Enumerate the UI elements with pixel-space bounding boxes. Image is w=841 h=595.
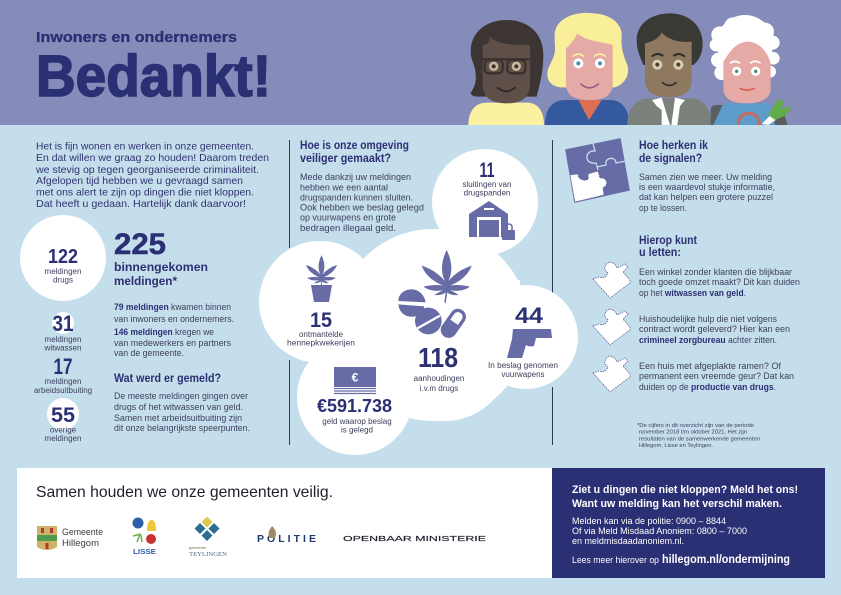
- text: source of reports: van inwoners en ondernemers.: [114, 314, 234, 325]
- icon: handgun: [507, 329, 552, 358]
- text: crimineel zorgbureau: [639, 314, 790, 346]
- text: safer environment: hebben we een aantal: [300, 182, 388, 194]
- heading: Hierop kunt u letten: Hierop kunt: [639, 235, 697, 247]
- stat: 118 aanhoudingen i.v.m drugs: aanhoudingen: [414, 374, 464, 383]
- icon: banknotes: €: [352, 370, 359, 384]
- stat: 122 meldingen drugs: meldingen: [45, 267, 81, 276]
- logo: Politie: [257, 526, 316, 545]
- stat: 591.738 euro seized: [317, 367, 392, 434]
- logo: Teylingen: [189, 516, 228, 558]
- text: signals: [639, 172, 775, 214]
- text: crimineel zorgbureau: contract wordt geleverd? Hier kan een: [639, 324, 790, 335]
- logo: Teylingen: gemeente: [189, 545, 206, 550]
- stat: 11 sluitingen van drugspanden: 11: [480, 159, 495, 182]
- stat: 31 meldingen witwassen: witwassen: [44, 344, 81, 352]
- heading: Hierop kunt u letten: u letten:: [639, 247, 681, 259]
- footnote: Hillegom, Lisse en Teylingen.: [639, 443, 713, 449]
- stat: 55 overige meldingen: overige: [50, 426, 77, 434]
- icon: puzzle piece 1: [593, 262, 630, 298]
- stat: 55 overige meldingen: [45, 398, 81, 443]
- stat: 15 ontmantelde hennepkwekerijen: [287, 255, 355, 348]
- stat: 31 meldingen witwassen: meldingen: [45, 335, 81, 344]
- text: crimineel zorgbureau: crimineel zorgbureau achter zitten.: [639, 335, 777, 346]
- intro text: Dat heeft u gedaan. Hartelijk dank daarvoor!: [36, 198, 246, 210]
- icon: puzzle: [566, 139, 629, 202]
- text: signals: op te lossen.: [639, 203, 687, 214]
- stat: 55 overige meldingen: 55: [51, 404, 75, 427]
- heading: Hoe herken ik de signalen: de signalen?: [639, 153, 702, 165]
- logo: Openbaar Ministerie: OPENBAAR MINISTERIE: [343, 534, 486, 543]
- stat: 44 in beslag genomen vuurwapens: 44: [515, 303, 544, 328]
- stat: 44 in beslag genomen vuurwapens: [488, 303, 558, 379]
- headline stat: 225: 225: [114, 228, 166, 261]
- logo: Lisse: [132, 518, 156, 556]
- title: Bedankt!: [36, 44, 271, 109]
- person: woman with glasses: [468, 20, 544, 125]
- illustration: four residents: [468, 13, 792, 125]
- person: elderly woman with shopping: [710, 15, 792, 125]
- stat: 122 meldingen drugs: drugs: [53, 276, 73, 284]
- stat: 122 meldingen drugs: [20, 215, 106, 301]
- stat: 122 meldingen drugs: 122: [48, 246, 78, 268]
- footnote: [637, 423, 760, 449]
- heading: Hierop kunt u letten: [639, 235, 697, 259]
- stat: 55 overige meldingen: meldingen: [45, 434, 81, 443]
- intro text: met ons alert te zijn op dingen die niet kloppen.: [36, 187, 254, 199]
- stat: 17 meldingen arbeidsuitbuiting: arbeidsuitbuiting: [34, 386, 92, 395]
- stat: 591.738 euro seized: geld waarop beslag: [322, 417, 392, 426]
- headline stat: 225: [114, 228, 208, 288]
- heading: Hoe is onze omgeving veiliger gemaakt: veiliger gemaakt?: [300, 153, 391, 165]
- text: safer environment: drugspanden kunnen sluiten.: [300, 192, 413, 204]
- stat: 15 ontmantelde hennepkwekerijen: 15: [310, 309, 332, 332]
- person: man in grey jacket: [627, 13, 712, 125]
- icon: puzzle piece 2: [593, 309, 630, 345]
- stat: 591.738 euro seized: is gelegd: [341, 426, 373, 434]
- text: signals: Samen zien we meer. Uw melding: [639, 172, 772, 183]
- text: signals: is een waardevol stukje informatie,: [639, 182, 775, 193]
- text: productie van drugs: Een huis met afgeplakte ramen? Of: [639, 361, 781, 372]
- panel: partners: [17, 468, 553, 578]
- heading: Hoe is onze omgeving veiliger gemaakt: Hoe is onze omgeving: [300, 140, 409, 152]
- person: blonde woman: [545, 13, 629, 125]
- white bubble cloud: [259, 149, 578, 455]
- intro text: En dat willen we graag zo houden! Daarom treden: [36, 152, 269, 164]
- stat: 118 aanhoudingen i.v.m drugs: i.v.m drugs: [420, 384, 458, 393]
- stat: 31 meldingen witwassen: 31: [52, 311, 74, 336]
- stat: 11 sluitingen van drugspanden: [463, 159, 515, 240]
- stat: 44 in beslag genomen vuurwapens: vuurwapens: [501, 370, 545, 379]
- logo: Hillegom: Gemeente: [62, 527, 103, 538]
- panel: call to action: Of via Meld Misdaad Anoniem: 0800 – 7000: [572, 526, 747, 536]
- stat: 11 sluitingen van drugspanden: drugspanden: [464, 188, 510, 198]
- text: productie van drugs: [639, 361, 794, 393]
- panel: call to action: Lees meer hierover op: [572, 555, 659, 565]
- text: witwassen van geld: op het witwassen van geld.: [639, 288, 746, 299]
- intro text: [35, 140, 269, 210]
- icon: puzzle piece 3: [593, 356, 630, 392]
- heading: Samen houden: Samen houden we onze gemeenten veilig.: [36, 484, 333, 501]
- text: safer environment: Ook hebben we beslag gelegd: [300, 202, 424, 214]
- footnote: resultaten van de samenwerkende gemeenten: [639, 436, 760, 442]
- heading: Hoe herken ik de signalen: [639, 140, 709, 165]
- subtitle: Inwoners en ondernemers: [36, 29, 237, 46]
- text: safer environment: bedragen illegaal geld.: [300, 223, 396, 234]
- text: what was reported: De meeste meldingen gingen over: [114, 391, 248, 402]
- panel: call to action: Ziet u dingen die niet kloppen? Meld het ons!: [572, 484, 798, 496]
- logo: Politie: POLITIE: [257, 533, 316, 545]
- stat: 118 aanhoudingen i.v.m drugs: [398, 250, 472, 393]
- footnote: november 2018 t/m oktober 2021. Het zijn: [639, 430, 747, 436]
- text: source of reports: van de gemeente.: [114, 348, 184, 359]
- text: witwassen van geld: [639, 267, 800, 299]
- text: witwassen van geld: Een winkel zonder klanten die blijkbaar: [639, 267, 792, 278]
- headline stat: 225: meldingen*: [114, 274, 177, 288]
- text: witwassen van geld: toch goede omzet maakt? Dit kan duiden: [639, 277, 800, 288]
- text: what was reported: drugs of het witwassen van geld.: [114, 402, 243, 413]
- text: what was reported: dit onze belangrijkste speerpunten.: [114, 423, 250, 434]
- text: source of reports: 146 meldingen kregen we: [114, 327, 214, 338]
- icon: cannabis leaf and pills: [398, 250, 472, 341]
- heading: Wat werd er gemeld: Wat werd er gemeld?: [114, 373, 221, 385]
- panel: call to action: Melden kan via de politie: 0900 – 8844: [572, 516, 726, 526]
- stat: 17 meldingen arbeidsuitbuiting: meldingen: [45, 377, 81, 386]
- text: safer environment: Mede dankzij uw meldingen: [300, 172, 411, 183]
- heading: Hoe is onze omgeving veiliger gemaakt: [300, 140, 409, 165]
- text: crimineel zorgbureau: Huishoudelijke hulp die niet volgens: [639, 314, 777, 325]
- text: safer environment: [300, 172, 424, 234]
- logo: Hillegom: [37, 526, 103, 550]
- panel: call to action: [552, 468, 825, 578]
- stat: 44 in beslag genomen vuurwapens: In beslag genomen: [488, 361, 558, 370]
- panel: call to action: Want uw melding kan het verschil maken.: [572, 498, 782, 510]
- intro text: we stevig op tegen georganiseerde criminaliteit.: [35, 164, 259, 176]
- stat: 15 ontmantelde hennepkwekerijen: ontmantelde: [299, 330, 344, 339]
- stat: 591.738 euro seized: €591.738: [317, 395, 392, 416]
- stat: 11 sluitingen van drugspanden: sluitingen van: [463, 180, 511, 189]
- intro text: Afgelopen tijd hebben we u gevraagd samen: [36, 175, 243, 187]
- logo: Lisse: LISSE: [133, 547, 156, 556]
- stat: 15 ontmantelde hennepkwekerijen: hennepkwekerijen: [287, 338, 355, 348]
- panel: call to action: hillegom.nl/ondermijning: [662, 554, 790, 566]
- text: what was reported: Samen met arbeidsuitbuiting zijn: [114, 413, 242, 424]
- stat: 118 aanhoudingen i.v.m drugs: 118: [418, 342, 458, 373]
- text: source of reports: [114, 302, 234, 359]
- logo: Teylingen: TEYLINGEN: [189, 552, 228, 558]
- footnote: *De cijfers in dit overzicht zijn van de periode: [637, 423, 754, 429]
- text: source of reports: 79 meldingen kwamen binnen: [114, 302, 231, 313]
- icon: cannabis plant in pot: [306, 255, 337, 302]
- text: safer environment: op vuurwapens en grote: [300, 212, 396, 224]
- stat: 31 meldingen witwassen: [44, 311, 81, 352]
- stat: 17 meldingen arbeidsuitbuiting: 17: [54, 354, 72, 379]
- heading: Hoe herken ik de signalen: Hoe herken ik: [639, 140, 709, 152]
- panel: call to action: en meldmisdaadanoniem.nl.: [572, 536, 684, 546]
- text: source of reports: van medewerkers en partners: [114, 338, 231, 349]
- logo: Hillegom: Hillegom: [62, 538, 99, 549]
- icon: warehouse with lock: [469, 201, 515, 240]
- text: productie van drugs: duiden op de productie van drugs.: [639, 382, 776, 393]
- headline stat: 225: binnengekomen: [114, 260, 208, 274]
- intro text: Het is fijn wonen en werken in onze gemeenten.: [36, 140, 254, 152]
- stat: 17 meldingen arbeidsuitbuiting: [34, 354, 92, 395]
- text: productie van drugs: permanent een vreemde geur? Dat kan: [639, 371, 794, 382]
- text: what was reported: [114, 391, 250, 434]
- text: signals: dat kan helpen een grotere puzzel: [639, 192, 773, 203]
